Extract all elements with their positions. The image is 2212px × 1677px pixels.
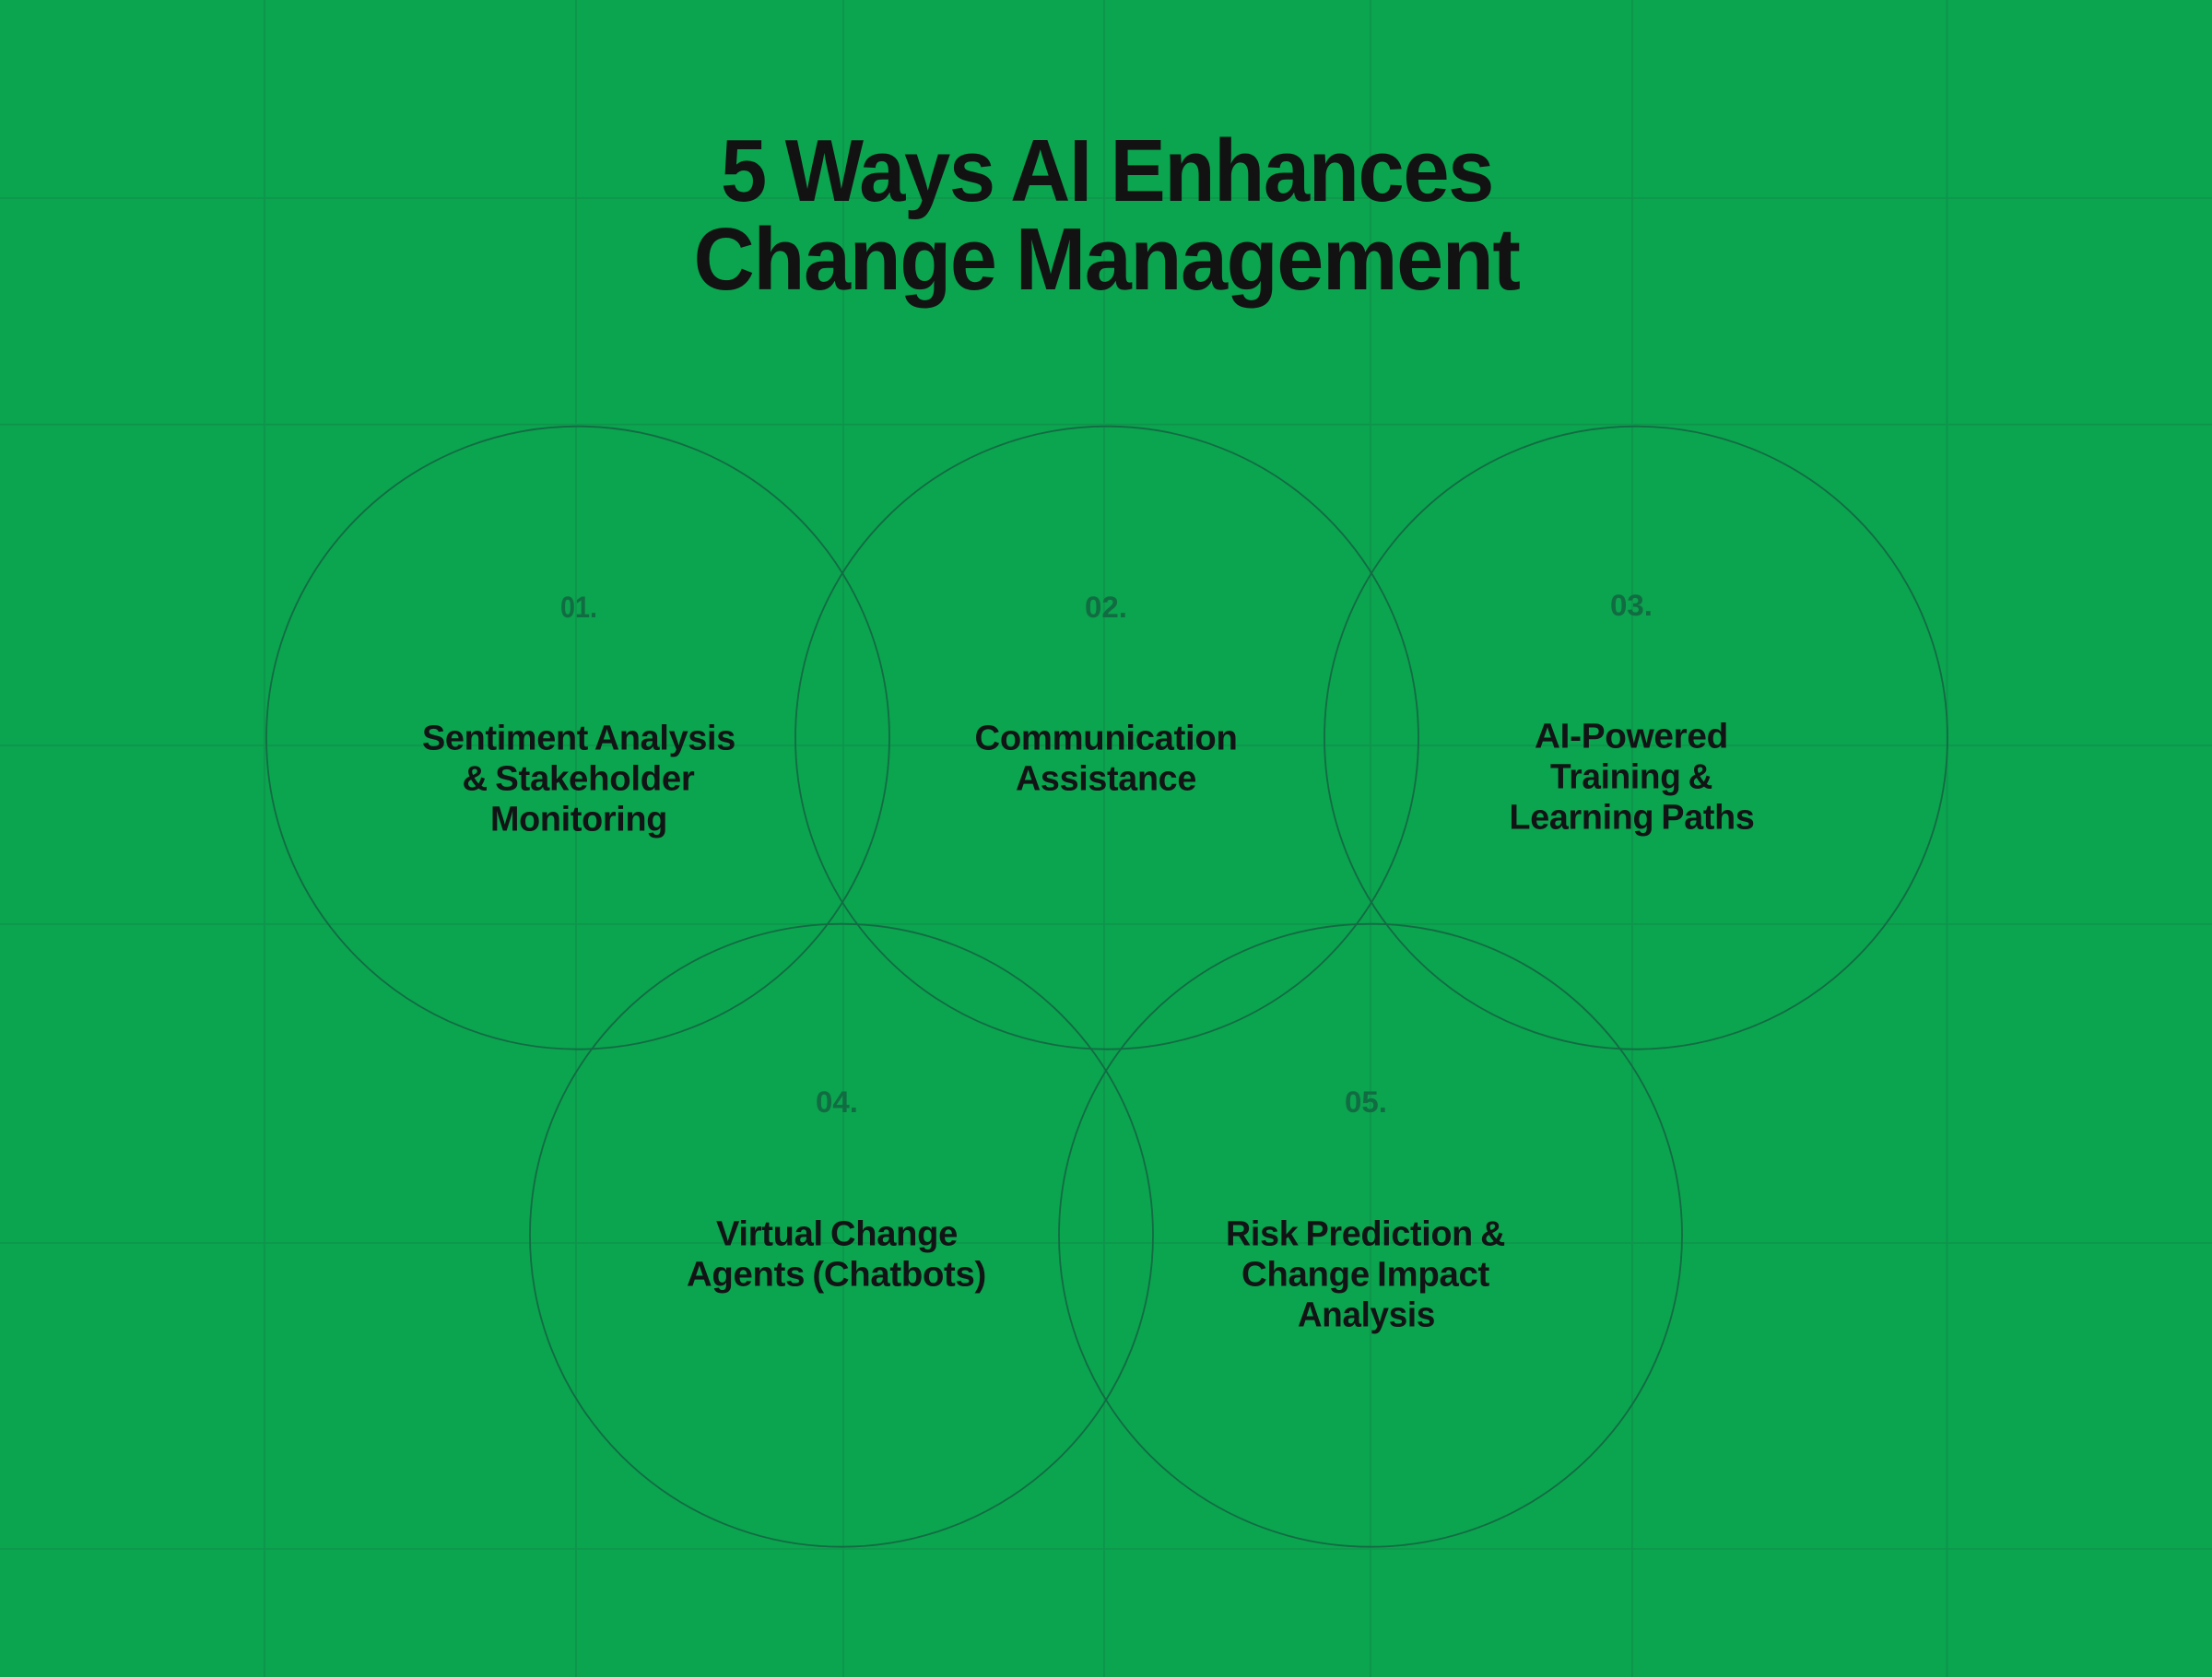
panel: 01 sentiment analysis [266, 427, 889, 1050]
label 05: Analysis [1298, 1296, 1435, 1334]
panel: 04 virtual change agents [530, 924, 1153, 1547]
label 05: Risk Prediction & [1226, 1214, 1505, 1253]
label 01: Monitoring [490, 800, 667, 838]
label 01 [422, 719, 735, 838]
number 04: 04. [816, 1085, 858, 1119]
label 02: Communication [975, 719, 1237, 757]
circle 05 [1059, 924, 1682, 1547]
label 04: Virtual Change [716, 1214, 958, 1253]
title: 5 Ways AI Enhances [721, 122, 1493, 220]
label 03: Learning Paths [1510, 798, 1755, 837]
title: Change Management [693, 210, 1520, 309]
label 05 [1226, 1214, 1505, 1334]
label 03: AI-Powered [1535, 717, 1728, 756]
number 03: 03. [1610, 589, 1653, 622]
circle 04 [530, 924, 1153, 1547]
label 03: Training & [1550, 757, 1712, 796]
circle 02 [795, 427, 1418, 1050]
title [693, 122, 1520, 309]
number 02: 02. [1085, 591, 1127, 624]
label 04 [687, 1214, 986, 1294]
label 05: Change Impact [1241, 1255, 1490, 1294]
label 01: Sentiment Analysis [422, 719, 735, 757]
number 05: 05. [1345, 1085, 1387, 1119]
circle 03 [1324, 427, 1947, 1050]
label 02 [975, 719, 1237, 798]
panel: 02 communication assistance [795, 427, 1418, 1050]
label 02: Assistance [1016, 759, 1196, 798]
number 01: 01. [560, 591, 597, 624]
label 03 [1510, 717, 1755, 837]
panel: 05 risk prediction [1059, 924, 1682, 1547]
panel: 03 ai-powered training [1324, 427, 1947, 1050]
label 04: Agents (Chatbots) [687, 1255, 986, 1294]
label 01: & Stakeholder [463, 759, 695, 798]
circle 01 [266, 427, 889, 1050]
